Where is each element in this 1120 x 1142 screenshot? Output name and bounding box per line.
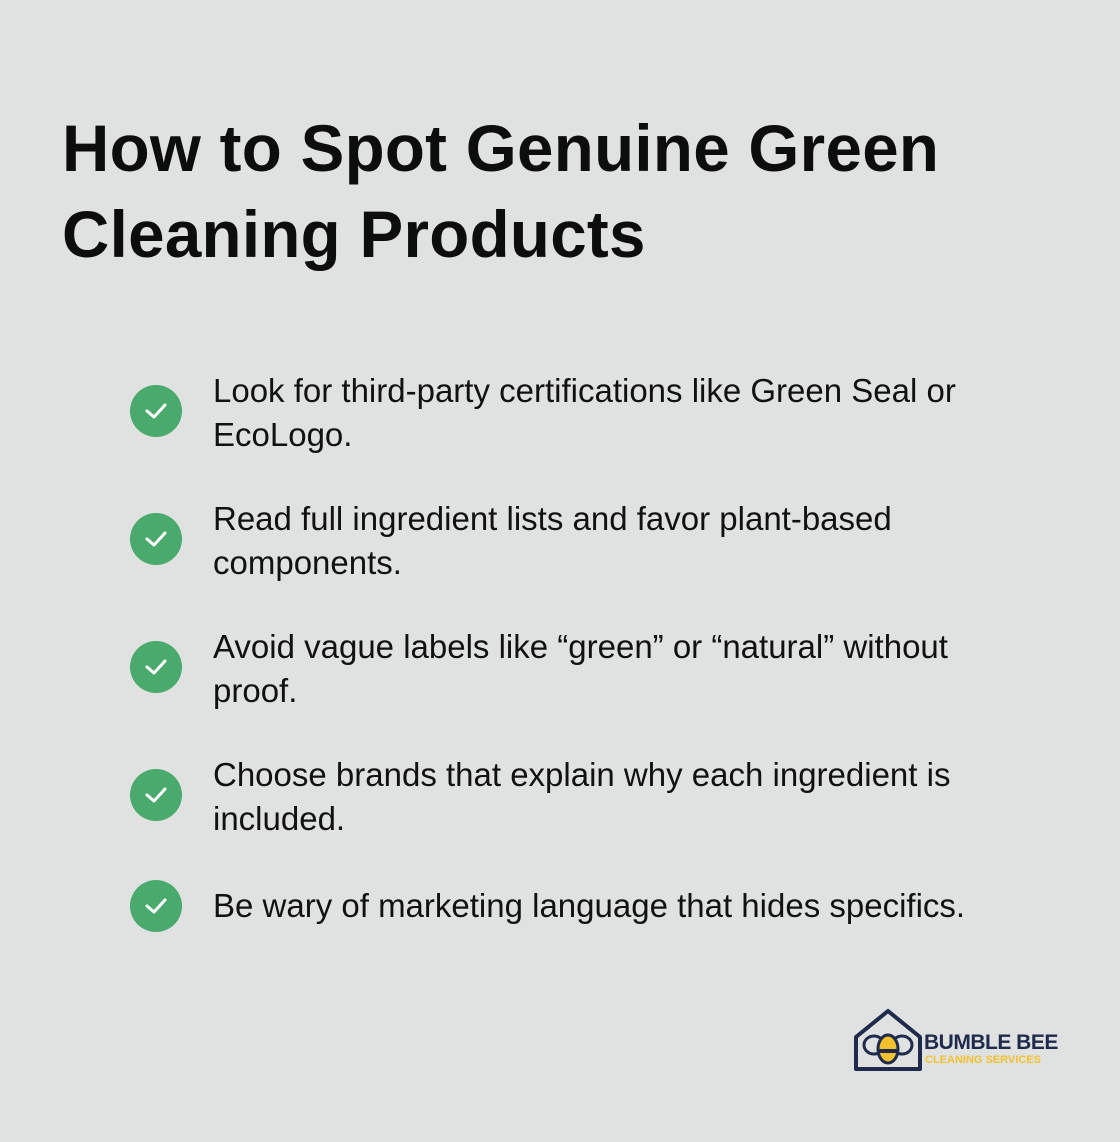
icon: bee house [854, 1008, 922, 1071]
logo: CLEANING SERVICES [925, 1054, 1041, 1066]
item 2 [130, 500, 892, 581]
text 4: Choose brands that explain why each ingredient is included. [213, 756, 950, 837]
icon: check [130, 880, 182, 932]
text 2: Read full ingredient lists and favor plant-based components. [213, 500, 892, 581]
title: Cleaning Products [62, 198, 646, 271]
logo [854, 1008, 1058, 1071]
icon: check [130, 641, 182, 693]
title: How to Spot Genuine Green [62, 112, 939, 185]
text 3: Avoid vague labels like “green” or “natural” without proof. [213, 628, 948, 709]
icon: check [130, 769, 182, 821]
icon: check [130, 385, 182, 437]
item 1 [130, 372, 956, 453]
item 4 [130, 756, 950, 837]
icon: check [130, 513, 182, 565]
text 5: Be wary of marketing language that hides specifics. [213, 887, 965, 924]
title [62, 112, 939, 271]
text 1: Look for third-party certifications like Green Seal or EcoLogo. [213, 372, 956, 453]
item 3 [130, 628, 948, 709]
logo text: BUMBLE BEE [924, 1031, 1058, 1054]
item 5 [130, 880, 965, 932]
